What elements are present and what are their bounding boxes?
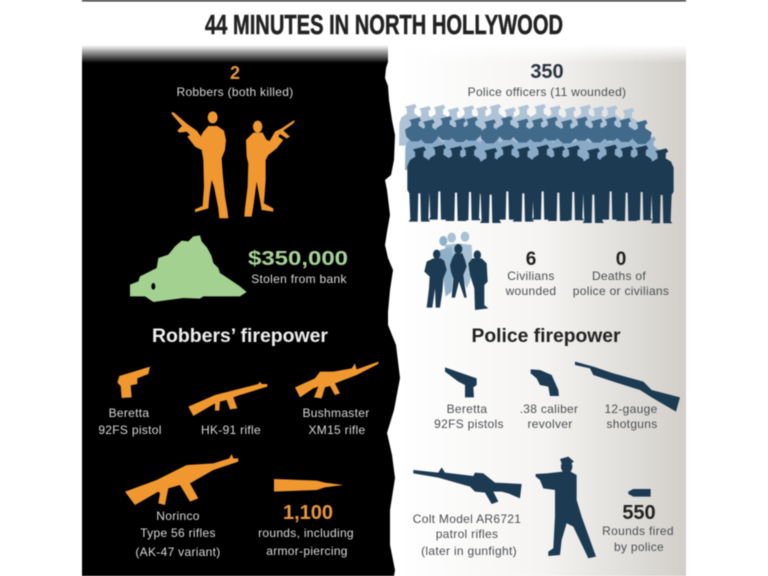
stat: 1,100 rounds: armor-piercing [266, 544, 348, 558]
icon: rifle bullet [274, 479, 343, 492]
icon: Beretta pistol [117, 367, 150, 398]
panel: police background [400, 45, 686, 576]
panel: robbers background [82, 45, 400, 576]
stat: 0 deaths: police or civilians [573, 284, 669, 298]
stat: 6 civilians wounded: wounded [505, 284, 556, 298]
icons: robbers' weapons [117, 362, 378, 505]
icon: Beretta pistol [445, 367, 477, 397]
stat: 350 officers: Police officers (11 wounded) [468, 85, 626, 99]
label: Colt rifles: patrol rifles [436, 527, 498, 541]
stat: 350 officers [468, 61, 626, 99]
top rule [82, 0, 686, 2]
icon: revolver [531, 369, 559, 396]
label: revolver: .38 caliber [520, 402, 578, 416]
stat: 0 deaths [573, 249, 669, 298]
icon: small bullet [628, 489, 651, 497]
label: shotguns: shotguns [606, 417, 658, 431]
icon: Colt rifle [413, 467, 522, 504]
label: Beretta pistol: Beretta [109, 406, 149, 420]
icon: shotgun [575, 362, 680, 412]
stat: 1,100 rounds: rounds, including [258, 526, 354, 540]
label: Bushmaster rifle: Bushmaster [302, 406, 370, 420]
label: revolver: revolver [527, 417, 573, 431]
panel: police content [399, 61, 680, 558]
stat: 2 robbers: 2 [230, 63, 240, 83]
label: Bushmaster rifle: XM15 rifle [308, 423, 366, 437]
stat: 6 civilians wounded [505, 249, 556, 298]
stat: money stolen: Stolen from bank [251, 272, 347, 286]
stat: 550 rounds [602, 502, 674, 554]
stat: 0 deaths: 0 [616, 249, 626, 270]
icon: civilians group [424, 232, 488, 310]
label: Beretta pistols: Beretta [447, 402, 487, 416]
label: Colt rifles: Colt Model AR6721 [413, 512, 521, 526]
label: Norinco rifles: Type 56 rifles [140, 526, 216, 540]
stat: 1,100 rounds [258, 502, 354, 558]
icon: Bushmaster rifle [295, 362, 378, 398]
icon: crowd of police officers [399, 104, 674, 223]
label: Norinco rifles: Norinco [156, 509, 200, 523]
stat: money stolen: $350,000 [248, 248, 348, 270]
icon: two armed robbers [172, 111, 295, 218]
stat: 2 robbers [176, 63, 294, 99]
label: HK-91 rifle: HK-91 rifle [201, 423, 261, 437]
icon: HK-91 rifle [188, 382, 267, 416]
icon: Norinco rifle [125, 454, 238, 505]
stat: 0 deaths: Deaths of [592, 269, 646, 283]
stat: 550 rounds: Rounds fired [602, 524, 674, 538]
label: Beretta pistol: 92FS pistol [98, 423, 162, 437]
stat: 550 rounds: 550 [622, 502, 656, 524]
title: 44 MINUTES IN NORTH HOLLYWOOD [205, 9, 563, 40]
label: Beretta pistols: 92FS pistols [434, 417, 504, 431]
top fade [82, 45, 686, 63]
icons: police weapons and officer [413, 362, 680, 558]
stat: 6 civilians wounded: 6 [526, 249, 536, 270]
heading: police firepower: Police firepower [472, 326, 621, 347]
panel: robbers content [98, 63, 378, 559]
stat: 2 robbers: Robbers (both killed) [176, 85, 294, 99]
label: Colt rifles: (later in gunfight) [421, 544, 517, 558]
stat: 6 civilians wounded: Civilians [507, 269, 555, 283]
label: shotguns: 12-gauge [604, 402, 658, 416]
stat: 1,100 rounds: 1,100 [283, 502, 333, 524]
stat: money stolen [248, 248, 348, 286]
stat: 350 officers: 350 [530, 61, 564, 83]
heading: robbers' firepower: Robbers’ firepower [152, 326, 329, 347]
icon: pile of money [130, 235, 247, 302]
stat: 550 rounds: by police [614, 540, 664, 554]
label: Norinco rifles: (AK-47 variant) [135, 545, 221, 559]
icon: aiming officer [536, 457, 596, 558]
